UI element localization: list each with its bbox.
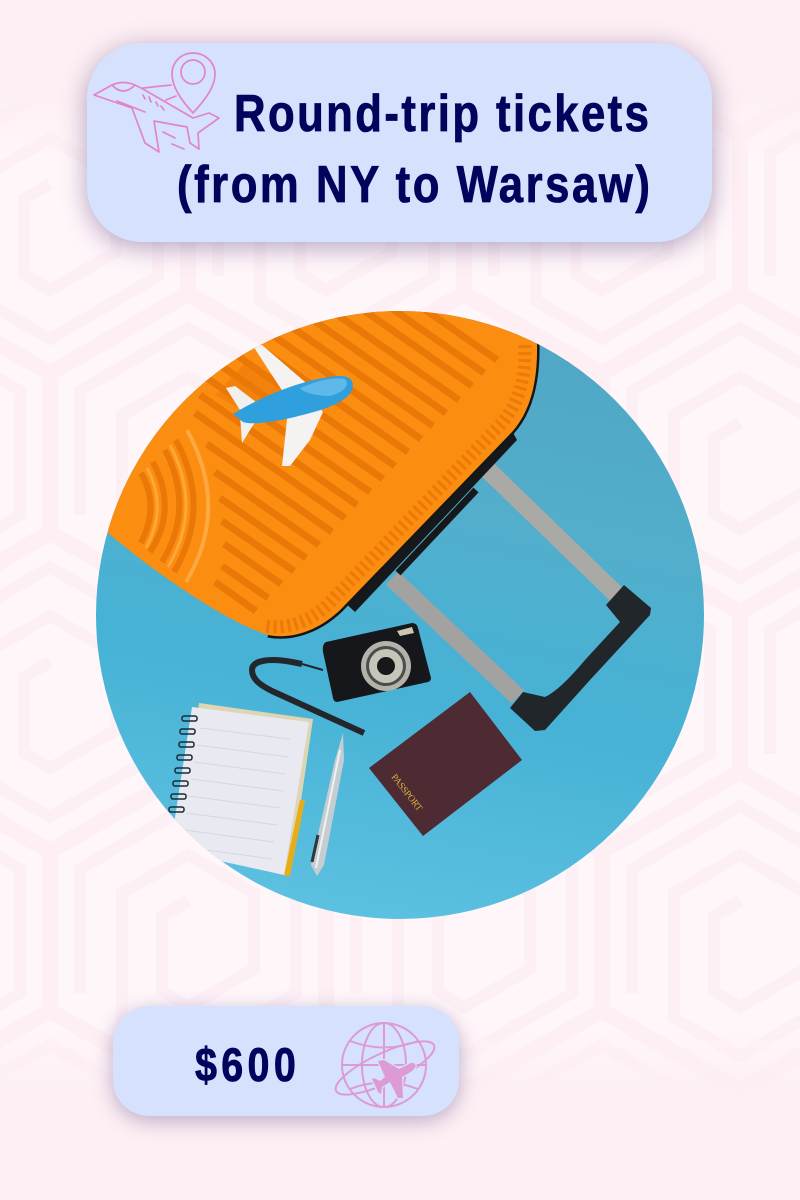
icon: airplane with location pin (94, 53, 219, 152)
toy airplane (226, 345, 353, 466)
camera strap (252, 660, 364, 733)
panel: title card (87, 43, 712, 242)
pen (311, 733, 344, 876)
trolley handle grip (510, 585, 651, 731)
heading: title text: Round-trip tickets (234, 86, 649, 143)
icon: globe with airplane (330, 1023, 440, 1107)
photo: travel flat lay in circle (96, 311, 704, 919)
panel: price card (113, 1006, 459, 1116)
heading: title text (177, 86, 650, 214)
trolley bars (392, 470, 618, 697)
suitcase (108, 311, 540, 639)
passport: PASSPORT (389, 773, 424, 814)
camera (323, 623, 431, 702)
suitcase top handle (342, 425, 517, 612)
price text: $600 (195, 1040, 296, 1092)
notebook (169, 703, 313, 876)
heading: title text: (from NY to Warsaw) (177, 157, 650, 214)
passport (369, 692, 522, 836)
